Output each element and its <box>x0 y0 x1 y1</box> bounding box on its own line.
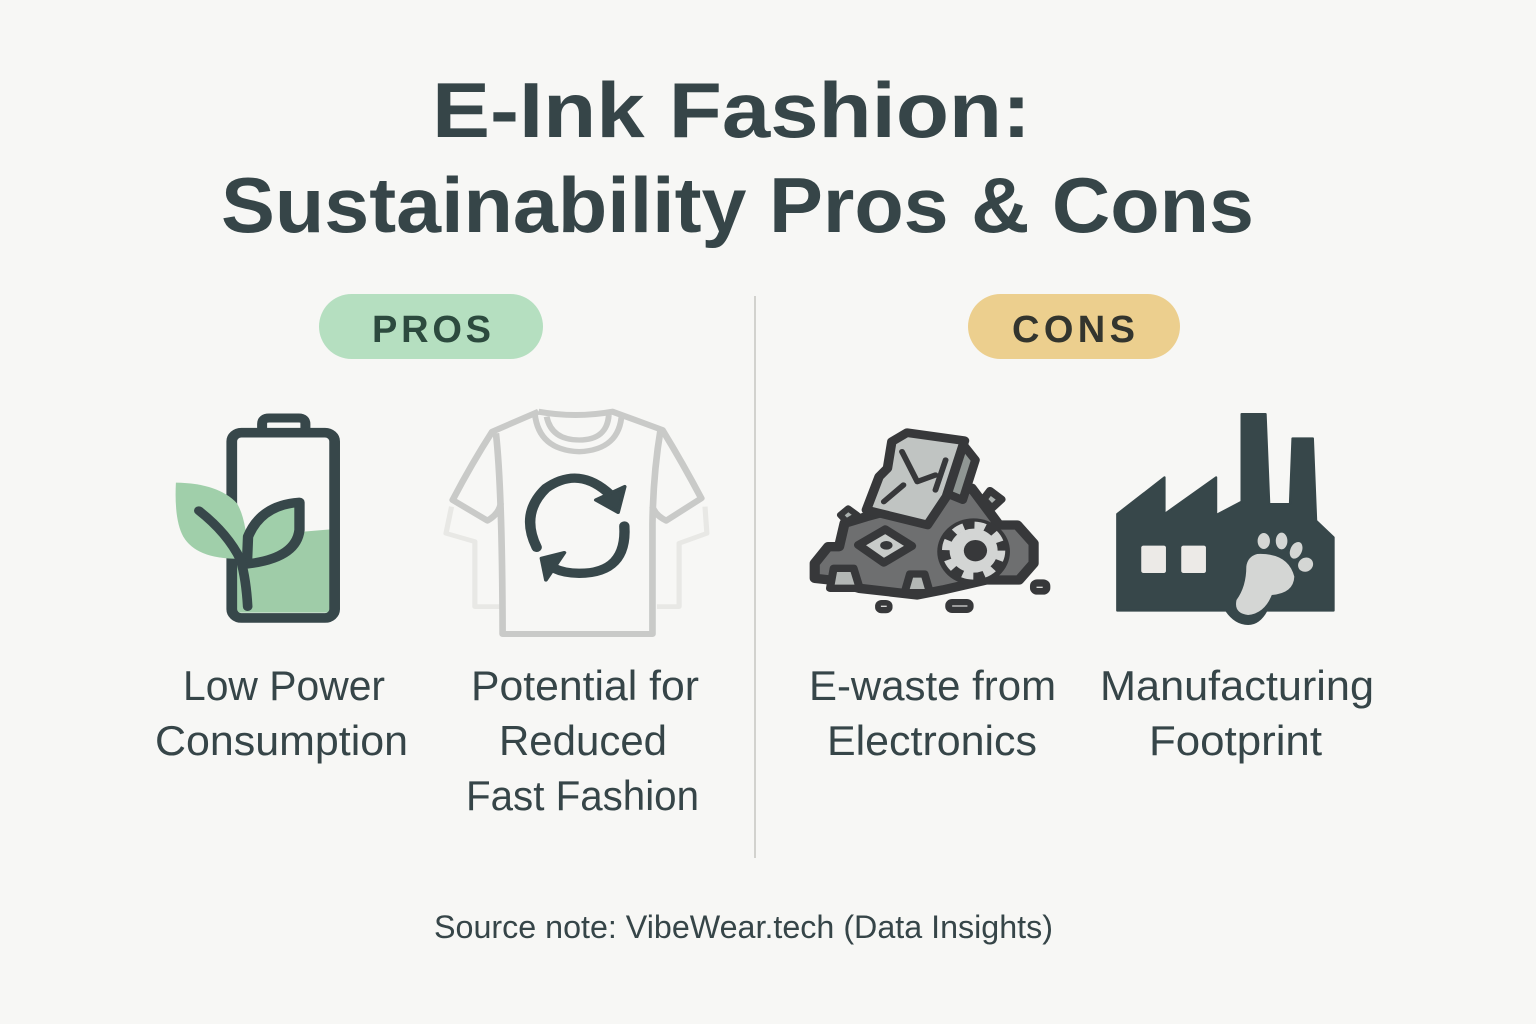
label: e-waste from electronics: E-waste from <box>809 662 1056 709</box>
badge: pros: PROS <box>372 309 491 351</box>
title: Sustainability Pros & Cons <box>221 161 1254 249</box>
label: manufacturing footprint <box>1100 662 1374 764</box>
label: reduced fast fashion: Fast Fashion <box>466 772 699 819</box>
badge: pros <box>319 294 543 359</box>
icon: factory with footprint <box>1117 414 1334 624</box>
icon: battery with sprout <box>176 418 335 618</box>
icon: e-waste pile <box>815 433 1050 613</box>
label: low power consumption: Consumption <box>155 717 408 764</box>
label: e-waste from electronics <box>809 662 1056 764</box>
label: low power consumption <box>155 662 408 764</box>
source note: Source note: VibeWear.tech (Data Insights) <box>434 909 1053 945</box>
label: e-waste from electronics: Electronics <box>827 717 1037 764</box>
icon: t-shirt with recycle arrows <box>446 412 707 634</box>
badge: cons: CONS <box>1012 309 1135 351</box>
footprint <box>1236 533 1316 615</box>
label: reduced fast fashion: Potential for <box>471 662 699 709</box>
title <box>221 66 1254 249</box>
label: reduced fast fashion: Reduced <box>499 717 667 764</box>
label: low power consumption: Low Power <box>183 662 385 709</box>
label: manufacturing footprint: Footprint <box>1149 717 1322 764</box>
title: E-Ink Fashion: <box>432 66 1031 154</box>
label: manufacturing footprint: Manufacturing <box>1100 662 1374 709</box>
label: reduced fast fashion <box>466 662 699 819</box>
badge: cons <box>968 294 1180 359</box>
